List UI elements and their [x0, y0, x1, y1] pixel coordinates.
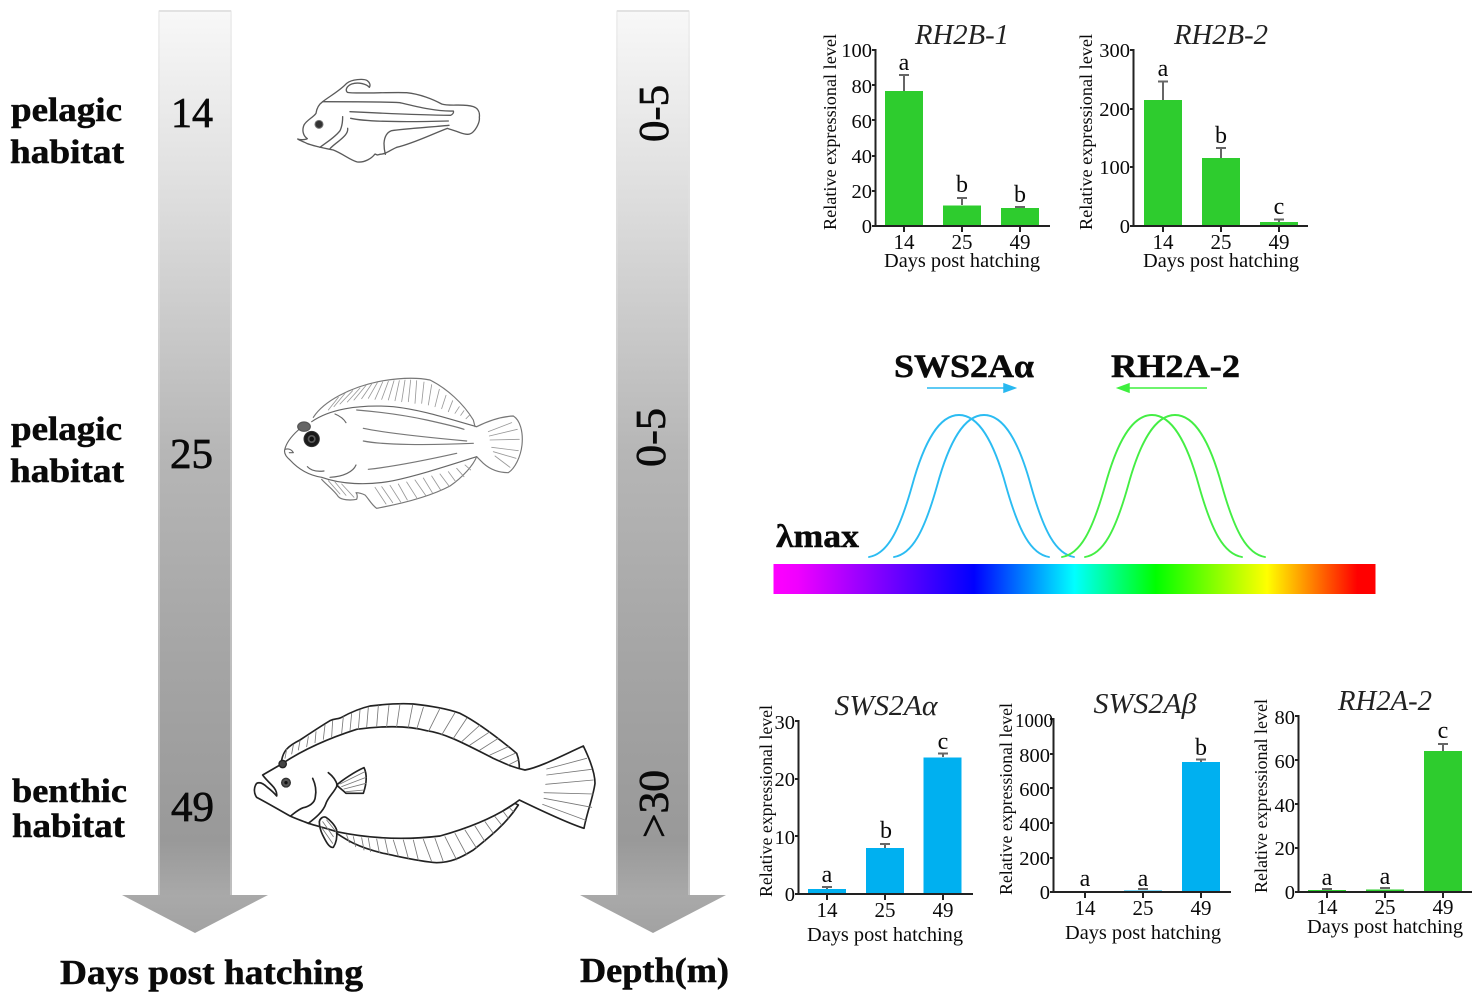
- significance letters: [899, 50, 1026, 208]
- x tick labels: 49: [1432, 895, 1454, 919]
- y tick labels: [1099, 40, 1130, 238]
- y tick labels: 800: [1019, 745, 1050, 767]
- axes: [1295, 715, 1472, 898]
- label: pelagic habitat, day 25: habitat: [10, 453, 125, 490]
- arrow: depth scale: [580, 10, 726, 933]
- significance letters: c: [1274, 194, 1284, 220]
- y axis label: Relative expressional level: [820, 34, 840, 230]
- significance letters: a: [1380, 864, 1391, 890]
- y tick labels: 100: [1099, 157, 1130, 179]
- significance letters: [1158, 56, 1284, 220]
- x tick labels: 49: [1190, 896, 1212, 920]
- significance letters: b: [880, 818, 892, 844]
- chart: SWS2A beta: [996, 689, 1231, 944]
- x tick labels: 25: [1132, 896, 1154, 920]
- y axis label: Relative expressional level: [1076, 34, 1096, 230]
- significance letters: a: [1080, 866, 1091, 892]
- y tick labels: 40: [1274, 795, 1295, 817]
- arrow: green shift to shorter wavelength: [1118, 384, 1207, 392]
- y tick labels: 0: [1040, 882, 1050, 904]
- y tick labels: 300: [1099, 40, 1130, 62]
- depth value greater than 30: >30: [632, 770, 678, 838]
- x tick labels: 25: [874, 898, 896, 922]
- label: benthic habitat, day 49: habitat: [12, 808, 126, 845]
- label: benthic habitat, day 49: benthic: [12, 773, 127, 810]
- x axis label: Days post hatching: [807, 924, 963, 946]
- axes: [872, 49, 1050, 232]
- y axis label: Relative expressional level: [996, 703, 1016, 895]
- y tick labels: 1000: [1015, 710, 1053, 732]
- x tick labels: 49: [1010, 230, 1030, 254]
- significance letters: a: [1138, 866, 1149, 892]
- error bars: [899, 75, 1025, 208]
- x tick labels: 25: [1374, 895, 1396, 919]
- significance letters: a: [899, 50, 910, 76]
- bars: [1308, 751, 1462, 892]
- error bars: [1158, 82, 1284, 222]
- y tick labels: [774, 712, 795, 906]
- chart: RH2A-2: [1251, 686, 1472, 938]
- significance letters: b: [956, 172, 968, 198]
- y tick labels: [841, 40, 872, 238]
- label: RH2A-2: RH2A-2: [1111, 349, 1240, 385]
- y tick labels: 400: [1019, 814, 1050, 836]
- y tick labels: 60: [1274, 751, 1295, 773]
- diagram: spectral sensitivity shift: [774, 349, 1376, 594]
- y tick labels: 0: [1285, 882, 1295, 904]
- day value 14: 14: [171, 91, 213, 137]
- day value 25: 25: [170, 432, 213, 478]
- significance letters: a: [1158, 56, 1169, 82]
- y axis label: Relative expressional level: [756, 705, 776, 897]
- spectrum bar: [774, 564, 1376, 594]
- significance letters: a: [822, 862, 833, 888]
- significance letters: c: [1438, 718, 1448, 744]
- axes: [1130, 49, 1308, 232]
- y tick labels: 20: [1274, 838, 1295, 860]
- x tick labels: [1152, 230, 1290, 254]
- label: pelagic habitat, day 14: [10, 92, 125, 171]
- y tick labels: 30: [774, 712, 795, 734]
- x tick labels: [1074, 896, 1212, 920]
- y tick labels: [1274, 707, 1295, 904]
- significance letters: b: [1014, 182, 1026, 208]
- y tick labels: 80: [1274, 707, 1295, 729]
- icon: benthic adult flatfish, day 49: [254, 704, 595, 863]
- y tick labels: 0: [785, 884, 795, 906]
- arrow: blue shift to longer wavelength: [927, 384, 1015, 392]
- day value 49: 49: [171, 785, 214, 831]
- x tick labels: [816, 898, 954, 922]
- error bars: [1138, 760, 1206, 890]
- y tick labels: 20: [774, 769, 795, 791]
- x axis label: Days post hatching: [884, 250, 1040, 272]
- y tick labels: 200: [1019, 848, 1050, 870]
- bars: [885, 91, 1039, 226]
- y tick labels: 80: [852, 76, 872, 98]
- y tick labels: 0: [1120, 216, 1130, 238]
- y tick labels: 40: [852, 146, 872, 168]
- y tick labels: 600: [1019, 779, 1050, 801]
- x tick labels: 14: [894, 230, 915, 254]
- icon: juvenile fish, day 25: [285, 378, 522, 508]
- depth value 0-5 middle: 0-5: [629, 408, 675, 467]
- x tick labels: [1316, 895, 1454, 919]
- bars: [1066, 762, 1220, 892]
- y tick labels: [1015, 710, 1053, 904]
- icon: larval fish, day 14: [298, 79, 479, 162]
- label: benthic habitat, day 49: [12, 773, 127, 845]
- x tick labels: 49: [1268, 230, 1290, 254]
- y tick labels: 20: [852, 181, 872, 203]
- chart: RH2B-1: [820, 20, 1050, 272]
- label: pelagic habitat, day 25: pelagic: [11, 411, 122, 448]
- x tick labels: 25: [1210, 230, 1232, 254]
- y tick labels: 10: [774, 827, 795, 849]
- x tick labels: 49: [932, 898, 954, 922]
- axes: [795, 720, 973, 900]
- label: pelagic habitat, day 25: [10, 411, 125, 490]
- bars: [808, 758, 962, 894]
- significance letters: b: [1195, 735, 1207, 761]
- chart title: RH2B-2: [1173, 20, 1268, 51]
- arrow: days post hatching timeline: [122, 10, 268, 933]
- chart: RH2B-2: [1076, 20, 1308, 272]
- significance letters: [1080, 735, 1207, 892]
- significance letters: [822, 729, 948, 888]
- chart title: SWS2Aα: [834, 691, 939, 722]
- significance letters: c: [938, 729, 948, 755]
- x axis label: Days post hatching: [1307, 916, 1463, 938]
- bars: [1144, 100, 1298, 226]
- y tick labels: 60: [852, 111, 872, 133]
- chart title: SWS2Aβ: [1094, 689, 1197, 720]
- x tick labels: 25: [952, 230, 972, 254]
- chart: SWS2A alpha: [756, 691, 973, 946]
- label: pelagic habitat, day 14: pelagic: [11, 92, 122, 129]
- label: lambda max: λmax: [776, 519, 860, 555]
- x tick labels: 14: [816, 898, 838, 922]
- x tick labels: 14: [1152, 230, 1174, 254]
- significance letters: a: [1322, 865, 1333, 891]
- y axis label: Relative expressional level: [1251, 699, 1271, 893]
- axis title: days post hatching: Days post hatching: [60, 953, 364, 992]
- chart title: RH2A-2: [1337, 686, 1432, 717]
- x tick labels: 14: [1074, 896, 1096, 920]
- depth value 0-5 upper: 0-5: [632, 85, 678, 142]
- label: SWS2A alpha: SWS2Aα: [894, 349, 1035, 385]
- axes: [1050, 718, 1231, 898]
- x tick labels: 14: [1316, 895, 1338, 919]
- axis title: depth: Depth(m): [580, 951, 729, 990]
- chart title: RH2B-1: [914, 20, 1009, 51]
- y tick labels: 100: [841, 40, 872, 62]
- x axis label: Days post hatching: [1143, 250, 1299, 272]
- error bars: [822, 754, 948, 889]
- label: pelagic habitat, day 14: habitat: [10, 134, 125, 171]
- x tick labels: [894, 230, 1030, 254]
- curves: RH2A-2 absorbance: [1062, 415, 1265, 557]
- y tick labels: 0: [862, 216, 872, 238]
- curves: SWS2A alpha absorbance: [869, 415, 1074, 557]
- y tick labels: 200: [1099, 99, 1130, 121]
- x axis label: Days post hatching: [1065, 922, 1221, 944]
- significance letters: b: [1215, 123, 1227, 149]
- error bars: [1322, 744, 1448, 890]
- significance letters: [1322, 718, 1448, 891]
